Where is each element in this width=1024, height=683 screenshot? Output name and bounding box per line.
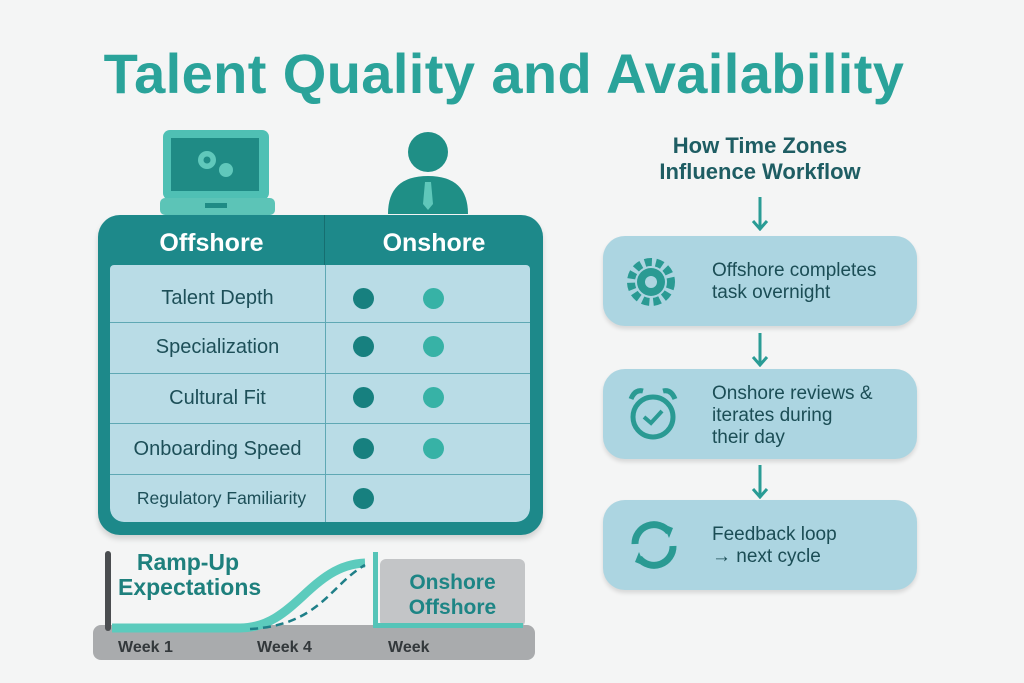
step 2: iterates during — [712, 405, 832, 426]
icon: person — [388, 132, 468, 214]
chart title: Ramp-Up Expectations — [118, 549, 261, 600]
icon: laptop — [160, 130, 275, 215]
icon: alarm clock — [628, 388, 678, 440]
row: specialization: Specialization — [156, 336, 279, 358]
step 2: Onshore reviews & — [712, 383, 873, 404]
step 1 — [603, 236, 917, 326]
row: regulatory familiarity: Regulatory Familiarity — [137, 488, 306, 508]
heading: workflow — [659, 133, 861, 184]
heading: workflow: How Time Zones — [673, 133, 847, 158]
row: talent depth: Talent Depth — [161, 287, 274, 309]
table body — [110, 265, 530, 522]
step 3 — [603, 500, 917, 590]
row: specialization — [110, 322, 530, 374]
step 3: Feedback loop — [712, 524, 837, 545]
chart: ramp-up expectations: Week 4 — [257, 639, 312, 656]
chart: ramp-up expectations: Week — [388, 639, 430, 656]
arrow — [752, 197, 768, 231]
icon: refresh — [632, 521, 676, 569]
row: onboarding speed — [110, 424, 530, 475]
header: onshore: Onshore — [383, 229, 485, 257]
step 1: task overnight — [712, 282, 830, 303]
row: onboarding speed: Onboarding Speed — [134, 438, 301, 460]
arrow — [752, 465, 768, 499]
legend: Onshore Offshore — [409, 571, 496, 619]
row: talent depth — [110, 265, 530, 323]
row: cultural fit — [110, 373, 530, 424]
step 2 — [603, 369, 917, 459]
chart: ramp-up expectations — [93, 549, 535, 660]
heading: workflow: Influence Workflow — [659, 159, 861, 184]
step 2: their day — [712, 427, 785, 448]
step 3: → next cycle — [712, 546, 821, 567]
title: Talent Quality and Availability — [104, 42, 904, 105]
row: cultural fit: Cultural Fit — [169, 387, 266, 409]
step 1: Offshore completes — [712, 260, 876, 281]
axis labels: Week 1 — [118, 639, 173, 656]
arrow — [752, 333, 768, 367]
header: offshore: Offshore — [159, 229, 264, 257]
icon: gear — [627, 258, 675, 306]
panel: comparison table — [98, 215, 543, 535]
row: regulatory familiarity — [137, 488, 374, 509]
